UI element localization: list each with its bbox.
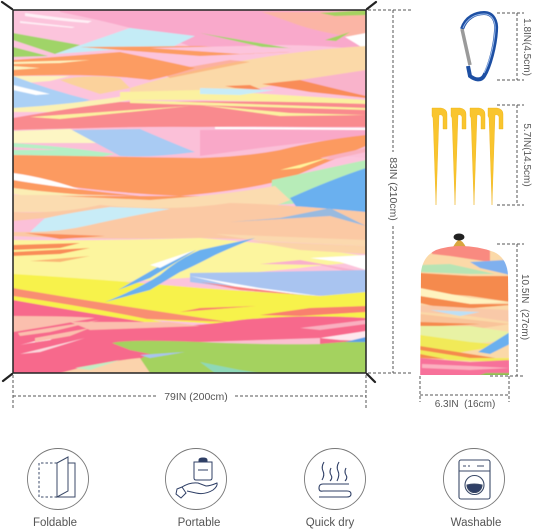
- feature: washable: Washable: [451, 517, 501, 529]
- icon: washing machine: [459, 460, 490, 499]
- icon: steam over towel: [319, 462, 351, 497]
- peach wave, upper right: [130, 46, 366, 92]
- orange band, upper left: [13, 52, 195, 80]
- yellow band: [13, 274, 366, 325]
- dimension: blanket height: [368, 10, 412, 373]
- feature: foldable: [28, 448, 88, 529]
- orange band: [13, 135, 366, 196]
- dimension: bag height: [490, 244, 530, 376]
- green band: [112, 340, 366, 373]
- peach band: [14, 203, 366, 240]
- feature: foldable: Foldable: [33, 517, 77, 529]
- dimension: bag height: 10.5IN (27cm): [519, 274, 530, 340]
- dimension: tent pegs: [497, 105, 532, 205]
- cream yellow band: [13, 238, 366, 282]
- icon: hand holding bag: [176, 458, 217, 498]
- salmon band: [13, 101, 366, 131]
- dimension: carabiner: [497, 13, 532, 80]
- icon: tent pegs: [432, 108, 503, 205]
- icon: carabiner: [462, 13, 496, 79]
- storage bag: [420, 234, 510, 376]
- top pink area: [60, 10, 366, 50]
- feature: portable: Portable: [178, 517, 220, 529]
- dimension: blanket height: 83IN (210cm): [387, 157, 399, 221]
- dimension: tent pegs: 5.7IN(14.5cm): [521, 123, 532, 187]
- feature: portable: [166, 448, 226, 529]
- blanket border and corner loops: [2, 2, 376, 382]
- periwinkle band: [190, 270, 366, 298]
- icon: folded sheet: [39, 457, 75, 497]
- dimension: carabiner: 1.8IN(4.5cm): [521, 18, 532, 76]
- pale mid band: [14, 126, 366, 132]
- dimension: blanket width: 79IN (200cm): [164, 391, 228, 403]
- blue streak: [105, 238, 255, 302]
- dimension: blanket width: [13, 375, 366, 410]
- dimension: bag width: 6.3IN (16cm): [435, 399, 495, 410]
- feature: washable: [444, 448, 504, 529]
- feature: quick dry: Quick dry: [306, 517, 355, 529]
- coral band: [13, 300, 366, 373]
- feature: quick dry: [304, 448, 366, 529]
- picnic blanket with abstract brush pattern: [13, 10, 366, 373]
- dimension: bag width: [420, 376, 509, 410]
- blue left stripes: [13, 76, 90, 108]
